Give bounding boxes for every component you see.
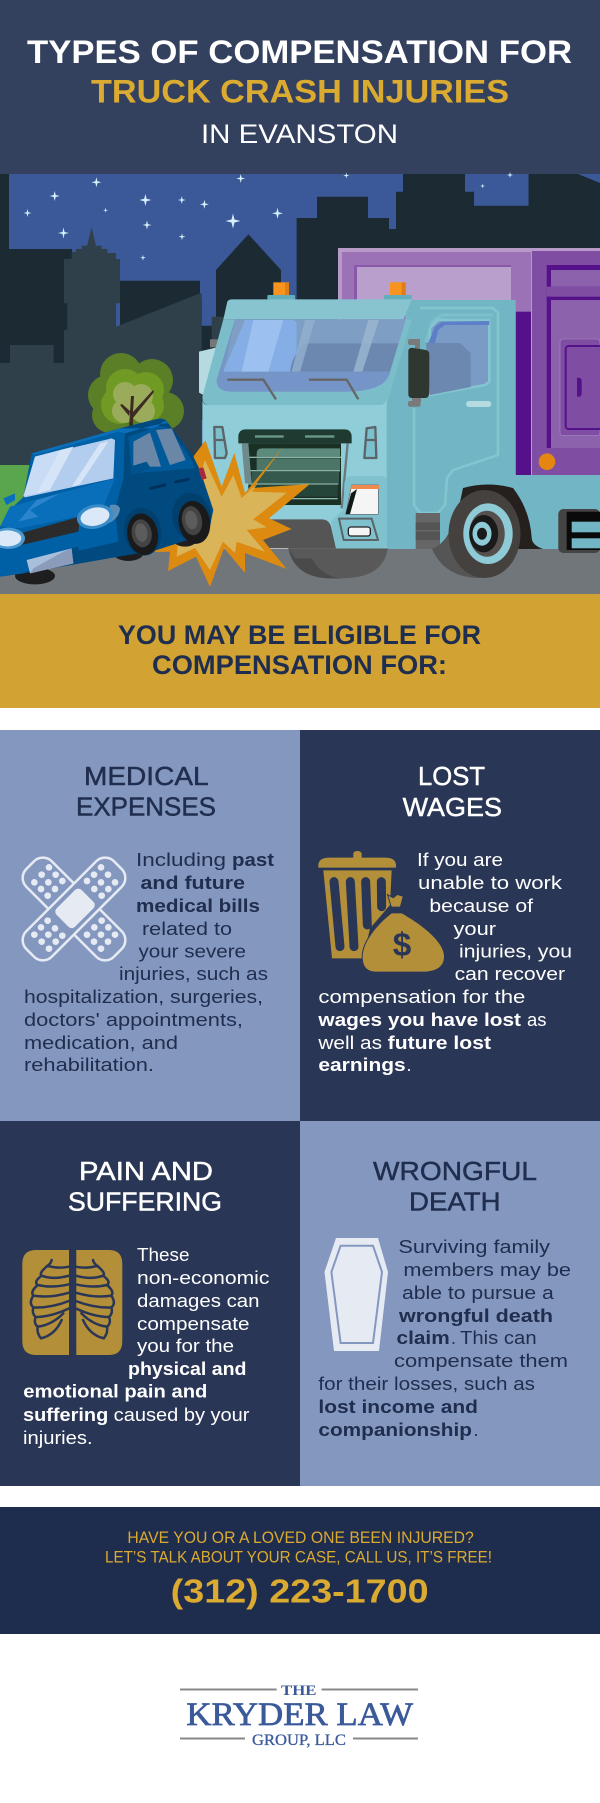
icon: bandage [17, 852, 131, 966]
heading: wrongful death [373, 1156, 537, 1217]
car front section [0, 428, 125, 577]
text: lost wages description: . [406, 1055, 412, 1075]
tree [88, 353, 184, 433]
car windshield [23, 438, 115, 497]
text: wrongful death description: . [451, 1328, 456, 1348]
heading: medical expenses: EXPENSES [76, 792, 216, 822]
cab upper front [202, 319, 412, 405]
panel: wrongful death [300, 1121, 600, 1486]
eligibility banner [0, 594, 600, 708]
text: pain and suffering description [23, 1245, 269, 1448]
cab door [414, 308, 498, 513]
car headlights [108, 505, 120, 523]
money bag [363, 895, 444, 972]
car body [0, 419, 213, 577]
text: wrongful death description: able to pursue a [402, 1283, 555, 1303]
text: lost wages description: can recover [455, 964, 565, 984]
call to action [0, 1507, 600, 1634]
heading: pain and suffering [68, 1156, 222, 1217]
side light panel [199, 347, 220, 395]
car wheels underside [15, 568, 55, 584]
heading: wrongful death: WRONGFUL [373, 1156, 537, 1186]
text: wrongful death description: lost income and [318, 1397, 478, 1417]
cab side body [386, 300, 600, 549]
heading: wrongful death: DEATH [409, 1187, 501, 1217]
text: lost wages description: wages you have lost [317, 1010, 521, 1030]
call to action: LET’S TALK ABOUT YOUR CASE, CALL US, IT’S FREE! [105, 1548, 492, 1566]
headlamp block [331, 476, 387, 548]
city skyline lighter buildings [0, 227, 229, 465]
text: lost wages description: your [454, 919, 496, 939]
logo: The Kryder Law Group: KRYDER LAW [186, 1697, 414, 1733]
car rear side window band [128, 426, 195, 473]
heading: lost wages: LOST [418, 761, 485, 791]
text: medical expenses description: rehabilitation. [24, 1055, 154, 1075]
text: pain and suffering description: These [137, 1245, 190, 1265]
truck front [199, 282, 412, 578]
beacons [267, 282, 412, 300]
chassis step [558, 509, 600, 553]
car door handles [151, 485, 165, 488]
text: pain and suffering description: suffering [23, 1405, 108, 1425]
text: medical expenses description: medication, and [24, 1033, 178, 1053]
text: medical expenses description [24, 850, 274, 1075]
mirror [408, 339, 429, 407]
truck [199, 248, 600, 578]
title header [0, 0, 600, 174]
car wheels [120, 505, 165, 559]
call to action: HAVE YOU OR A LOVED ONE BEEN INJURED? [127, 1529, 474, 1547]
trash can [318, 851, 396, 958]
text: wrongful death description: compensate them [394, 1351, 568, 1371]
title header: TYPES OF COMPENSATION FOR [27, 34, 572, 70]
text: wrongful death description: . [474, 1420, 479, 1440]
text: wrongful death description: claim [396, 1328, 450, 1348]
icon: rib cage [22, 1250, 122, 1355]
truck face [202, 398, 387, 548]
truck cargo box [338, 248, 600, 478]
call to action: (312) 223-1700 [171, 1573, 429, 1610]
icon: trash can and money bag [318, 851, 444, 972]
text: pain and suffering description: physical and [128, 1359, 246, 1379]
icon: coffin [324, 1238, 388, 1351]
eligibility banner: YOU MAY BE ELIGIBLE FOR [118, 620, 481, 650]
panel: lost wages [300, 730, 600, 1121]
text: medical expenses description: doctors' appointments, [24, 1010, 243, 1030]
heading: pain and suffering: SUFFERING [68, 1187, 222, 1217]
heading: lost wages: WAGES [403, 792, 502, 822]
text: medical expenses description: and future [140, 873, 245, 893]
text: medical expenses description: medical bills [136, 896, 260, 916]
car side windows [133, 433, 161, 467]
text: lost wages description [317, 850, 572, 1075]
text: wrongful death description: wrongful death [398, 1306, 553, 1326]
text: wrongful death description: Surviving family [398, 1237, 550, 1257]
car tail light [193, 457, 204, 470]
text: medical expenses description: hospitalization, surgeries, [24, 987, 263, 1007]
stars [24, 172, 513, 261]
text: wrongful death description [318, 1237, 571, 1440]
car [0, 419, 215, 584]
text: medical expenses description: injuries, such as [119, 964, 268, 984]
icon: trash can and money bag: $ [393, 927, 412, 964]
side trim lights [214, 427, 376, 458]
text: lost wages description: well as [317, 1033, 382, 1053]
text: pain and suffering description: non-economic [137, 1268, 269, 1288]
front tyre [288, 548, 388, 578]
rear wheel [432, 484, 543, 578]
text: medical expenses description: your severe [138, 941, 246, 961]
road [0, 549, 600, 594]
text: wrongful death description: companionship [318, 1420, 472, 1440]
text: pain and suffering description: emotional pain and [23, 1382, 207, 1402]
cab roof [223, 299, 412, 319]
text: pain and suffering description: damages can [137, 1291, 260, 1311]
text: wrongful death description: for their losses, such as [318, 1374, 535, 1394]
grey mount [210, 339, 222, 347]
text: pain and suffering description: injuries. [23, 1428, 93, 1448]
grass [0, 465, 210, 549]
heading: medical expenses: MEDICAL [84, 761, 209, 791]
grille [238, 429, 352, 508]
explosion [150, 440, 310, 587]
cab step [416, 513, 440, 549]
title header: TRUCK CRASH INJURIES [91, 73, 509, 109]
panel: medical expenses [0, 730, 300, 1121]
illustration: truck crash scene [0, 172, 600, 594]
title header: IN EVANSTON [201, 119, 398, 149]
text: wrongful death description: This can [460, 1328, 537, 1348]
car hood [0, 478, 115, 528]
logo: The Kryder Law Group: GROUP, LLC [252, 1732, 346, 1749]
text: lost wages description: as [527, 1010, 546, 1030]
text: lost wages description: because of [429, 896, 534, 916]
car mirrors [130, 462, 151, 475]
text: medical expenses description: Including [136, 850, 226, 870]
text: wrongful death description: members may be [403, 1260, 571, 1280]
heading: lost wages [403, 761, 502, 822]
text: lost wages description: If you are [417, 850, 503, 870]
text: pain and suffering description: you for the [137, 1336, 234, 1356]
car roof highlight [32, 421, 168, 455]
logo: The Kryder Law Group: THE [281, 1683, 316, 1699]
eligibility banner: COMPENSATION FOR: [152, 650, 447, 680]
heading: medical expenses [76, 761, 216, 822]
car plate [27, 548, 73, 573]
logo: The Kryder Law Group [180, 1683, 418, 1749]
text: lost wages description: unable to work [418, 873, 563, 893]
windshield [217, 319, 406, 399]
text: pain and suffering description: compensate [137, 1314, 250, 1334]
text: pain and suffering description: caused by your [114, 1405, 250, 1425]
text: medical expenses description: related to [142, 919, 232, 939]
panel: pain and suffering [0, 1121, 300, 1486]
text: medical expenses description: past [232, 850, 274, 870]
car grille [20, 517, 80, 545]
city skyline dark buildings [0, 174, 600, 420]
text: lost wages description: injuries, you [459, 941, 572, 961]
bumper [202, 519, 336, 548]
text: lost wages description: earnings [318, 1055, 406, 1075]
text: lost wages description: future lost [388, 1033, 491, 1053]
heading: pain and suffering: PAIN AND [79, 1156, 213, 1186]
text: lost wages description: compensation for the [318, 987, 525, 1007]
